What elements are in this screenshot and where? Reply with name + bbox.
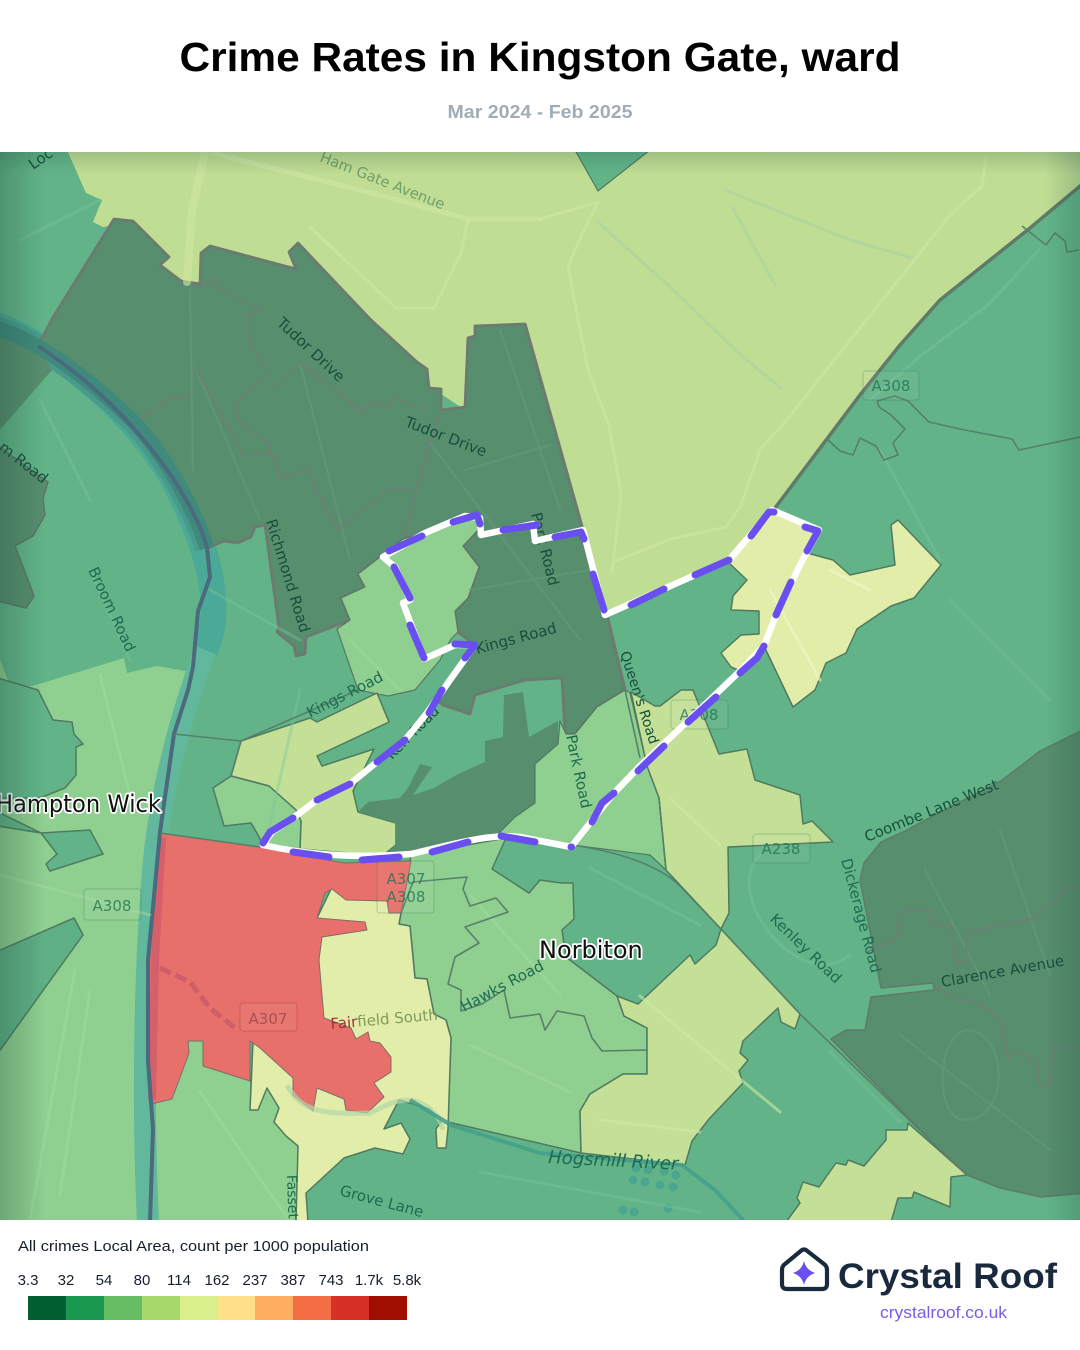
legend value labels	[18, 1272, 422, 1289]
boundary lines	[141, 182, 1080, 1149]
area: light green Norbiton south	[399, 838, 647, 1153]
road label: Kings Road east: Kings Road	[473, 619, 558, 658]
map edge vignette	[0, 152, 1080, 1220]
red river strip	[152, 838, 162, 1100]
road label: Hogsmill River: Hogsmill River	[548, 1147, 681, 1175]
road shield: A238	[753, 834, 810, 863]
road shield: A307	[240, 1003, 297, 1031]
road label: Richmond Road: Richmond Road	[262, 517, 314, 635]
area: yellow-green south-east	[786, 1123, 967, 1222]
road label: Fassett: Fassett	[283, 1175, 301, 1225]
road label: Queen's Road: Queen's Road	[616, 649, 661, 746]
road shield: A307 A308: A308	[387, 888, 425, 906]
road shield: A308 centre	[671, 700, 728, 729]
legend value labels: 1.7k	[355, 1272, 384, 1289]
legend value labels: 114	[167, 1272, 191, 1289]
legend value labels: 54	[96, 1272, 112, 1289]
area: west mid green patches	[0, 678, 83, 798]
logo: Crystal Roof	[782, 1250, 1057, 1322]
river Thames	[0, 322, 213, 1222]
ponds and stream	[287, 1085, 443, 1130]
ward boundary: Kingston Gate	[263, 510, 819, 860]
area: west light green	[0, 658, 191, 1230]
road label: Broom Road: Broom Road	[84, 564, 139, 655]
area: pale south of red	[250, 887, 451, 1222]
road label: Park Road upper: Park Road	[527, 511, 563, 588]
legend value labels: 5.8k	[393, 1272, 422, 1289]
place label: Hampton Wick: Hampton Wick	[0, 790, 161, 818]
road label: Coombe Lane West: Coombe Lane West	[862, 776, 1001, 846]
road shield: A307 A308	[377, 861, 434, 913]
road network	[0, 152, 1050, 1222]
water: filter beds	[618, 1164, 680, 1216]
logo url: crystalroof.co.uk	[880, 1304, 1008, 1322]
legend colour scale	[28, 1296, 407, 1320]
road shield: A307 A308: A307	[387, 870, 425, 888]
map base: mid green areas	[0, 152, 1080, 1220]
road label: Loc: Loc	[25, 144, 56, 173]
road shield: A308 north-east: A308	[872, 377, 910, 395]
road label: Tudor Drive north: Tudor Drive	[273, 313, 348, 386]
road shield: A307: A307	[249, 1010, 287, 1028]
area: south-west light green	[150, 1041, 298, 1222]
legend value labels: 162	[204, 1272, 230, 1289]
logo wordmark: Crystal Roof	[838, 1257, 1057, 1296]
place label: Norbiton: Norbiton	[539, 936, 643, 964]
legend value labels: 32	[58, 1272, 74, 1289]
icon: house with star	[782, 1250, 827, 1289]
area: pale east of ward	[721, 510, 941, 707]
road shield: A308 centre: A308	[680, 706, 718, 724]
legend value labels: 80	[134, 1272, 150, 1289]
road label: Kenley Road: Kenley Road	[766, 910, 845, 987]
road shield: A308 west	[84, 889, 141, 920]
road label: Grove Lane: Grove Lane	[338, 1181, 425, 1221]
area: yellow-green south centre	[580, 929, 800, 1165]
area: dark block in ward	[358, 692, 558, 856]
area: south yellow-green block	[231, 693, 396, 856]
area: top small mid green wedge	[575, 150, 650, 191]
legend value labels: 3.3	[18, 1272, 38, 1289]
area: light green Park Road	[497, 690, 666, 870]
road label: Ham Gate Avenue: Ham Gate Avenue	[318, 149, 447, 213]
road label: Fairfield South: Fairfield South	[330, 1006, 438, 1033]
dark river band	[0, 326, 207, 548]
area: dark east block	[831, 729, 1080, 1197]
area: yellow-green Queens Road	[631, 690, 833, 929]
legend title: All crimes Local Area, count per 1000 population	[18, 1238, 369, 1255]
river line	[38, 346, 210, 1222]
road label: Kings Road west: Kings Road	[304, 668, 386, 722]
road label: Park Road lower: Park Road	[562, 733, 595, 810]
area: light green west of ward	[213, 776, 301, 849]
road shield: A308 west: A308	[93, 897, 131, 915]
area: western dark patch	[0, 446, 48, 608]
road label: Hawks Road: Hawks Road	[457, 957, 547, 1016]
red zone railway detail	[160, 968, 235, 1028]
water: Hogsmill River	[410, 1100, 745, 1222]
road label: Kerr Road: Kerr Road	[384, 703, 443, 763]
area: dark high-density north block	[38, 219, 625, 734]
road shield: A308 north-east	[863, 371, 919, 400]
subtitle: date range: Mar 2024 - Feb 2025	[448, 102, 632, 122]
legend	[18, 1238, 422, 1320]
legend value labels: 387	[280, 1272, 306, 1289]
legend value labels: 237	[242, 1272, 268, 1289]
road label: Tudor Drive east: Tudor Drive	[402, 413, 489, 461]
legend value labels: 743	[318, 1272, 344, 1289]
road shield: A238: A238	[762, 840, 800, 858]
area: light green north park	[67, 150, 1080, 615]
road label: Clarence Avenue: Clarence Avenue	[940, 953, 1065, 991]
title: Crime Rates in Kingston Gate, ward	[180, 34, 900, 80]
road label: Dickerage Road: Dickerage Road	[837, 856, 885, 975]
area: ward inner light green	[337, 517, 479, 696]
area: red highest crime	[148, 833, 411, 1113]
